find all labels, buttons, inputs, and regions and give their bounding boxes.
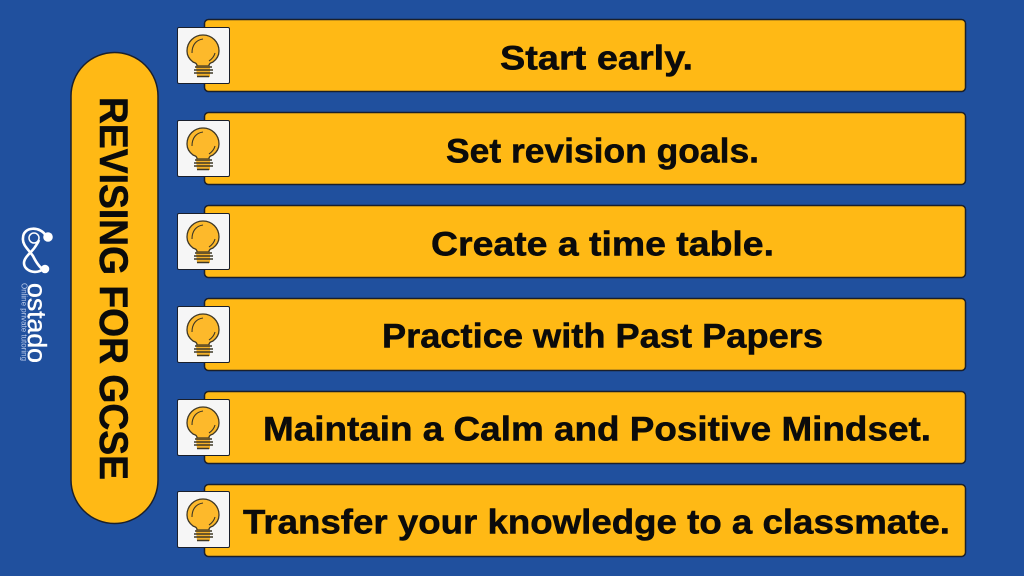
title pill: Revising for GCSE — [71, 52, 158, 524]
step 2: Set revision goals — [178, 112, 966, 184]
logo wordmark: ostado — [22, 283, 52, 363]
step 3: Create a time table: Create a time table. — [431, 226, 774, 264]
step 2: Set revision goals: Set revision goals. — [446, 132, 759, 170]
logo mark — [23, 229, 53, 273]
icon: light bulb — [178, 492, 230, 548]
step 5: Maintain a Calm and Positive Mindset: Maintain a Calm and Positive Mindset. — [263, 410, 931, 448]
step 4: Practice with Past Papers: Practice with Past Papers — [382, 318, 823, 356]
step 1: Start early — [178, 20, 966, 92]
icon: light bulb — [178, 120, 230, 176]
logo tagline: Online private tutoring — [20, 283, 28, 361]
icon: light bulb — [178, 214, 230, 270]
step 4: Practice with Past Papers — [178, 298, 966, 370]
icon: light bulb — [178, 306, 230, 362]
title pill: Revising for GCSE: REVISING FOR GCSE — [91, 97, 135, 480]
icon: light bulb — [178, 28, 230, 84]
step 6: Transfer your knowledge to a classmate — [178, 484, 966, 556]
icon: light bulb — [178, 400, 230, 456]
step 6: Transfer your knowledge to a classmate: Transfer your knowledge to a classmate. — [243, 504, 950, 542]
step 3: Create a time table — [178, 206, 966, 278]
logo: ostado — [20, 229, 53, 363]
step 1: Start early: Start early. — [500, 40, 693, 78]
step 5: Maintain a Calm and Positive Mindset — [178, 392, 966, 464]
